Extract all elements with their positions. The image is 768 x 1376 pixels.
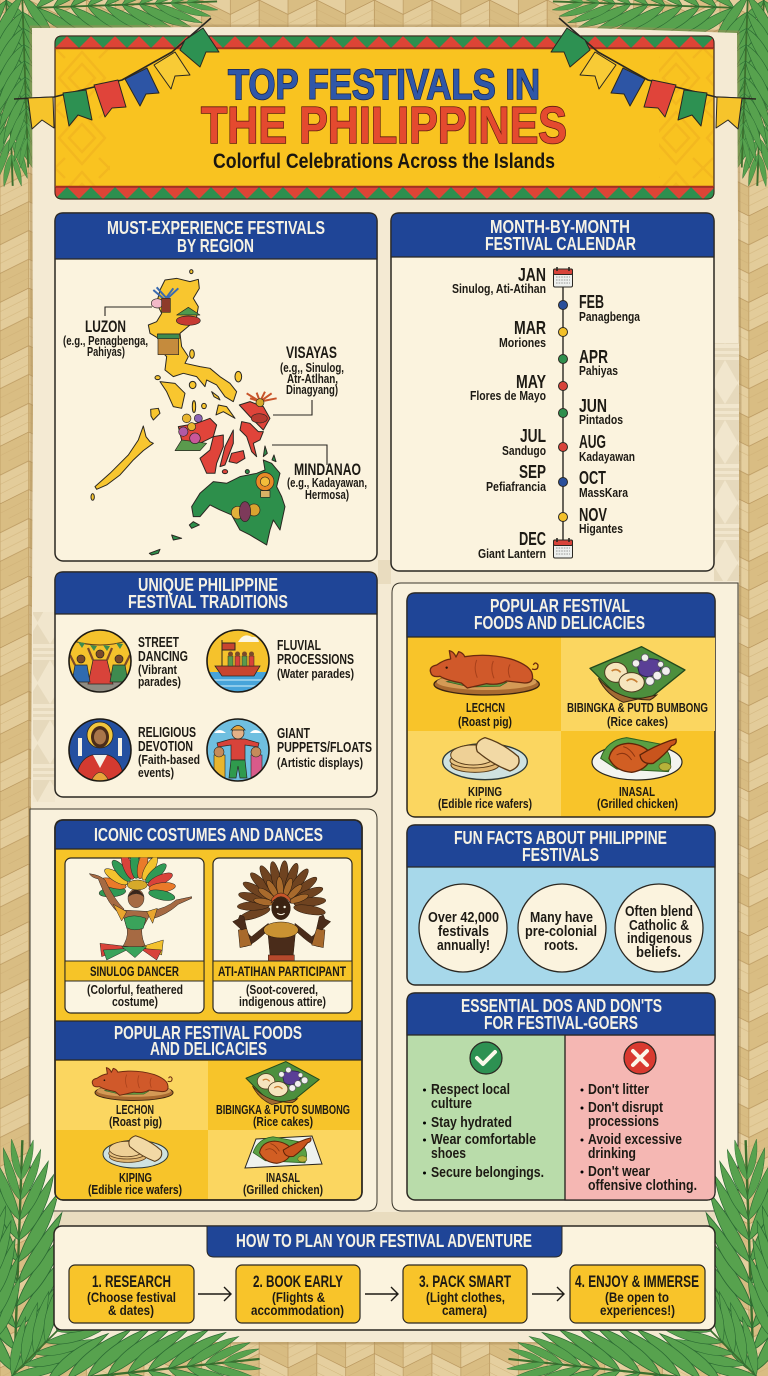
- step 2: [236, 1265, 360, 1323]
- list: don'ts: Don't wear: [588, 1164, 650, 1180]
- map icon: costume on Visayas: [247, 392, 277, 423]
- icon: giant puppets: [207, 719, 269, 781]
- list: dos: culture: [431, 1096, 472, 1112]
- label: Luzon: LUZON: [85, 318, 126, 336]
- list: dos: Respect local: [431, 1082, 510, 1098]
- description: indigenous attire): [239, 995, 326, 1009]
- heading: must-experience festivals: MUST-EXPERIENCE FESTIVALS: [107, 218, 325, 238]
- calendar entries: JUL: [520, 426, 546, 446]
- food: lechon: (Roast pig): [109, 1115, 162, 1129]
- fact: 42,000 festivals: festivals: [438, 924, 489, 940]
- heading: foods: POPULAR FESTIVAL: [490, 596, 630, 616]
- step 3: 3. PACK SMART: [419, 1273, 511, 1291]
- label: Visayas: Dinagyang): [286, 383, 338, 397]
- calendar entries: SEP: [519, 462, 546, 482]
- label: giant puppets: [277, 726, 372, 770]
- food: lechon: [92, 1068, 173, 1129]
- list: dos: Secure belongings.: [431, 1165, 544, 1181]
- panel: plan your adventure: [54, 1226, 715, 1330]
- calendar entries: AUG: [579, 432, 606, 452]
- list: don'ts: Don't disrupt: [588, 1100, 663, 1116]
- card: Ati-Atihan participant: [213, 858, 352, 1013]
- card: left lower backing: [30, 809, 377, 1211]
- food: lechon: LECHCN: [466, 701, 505, 715]
- list: don'ts: Don't litter: [588, 1082, 649, 1098]
- caption band: [65, 961, 204, 981]
- title line 1: TOP FESTIVALS IN: [228, 61, 540, 109]
- fact: blended beliefs: [615, 884, 703, 972]
- panel: fun facts: [407, 825, 715, 985]
- step 4: [570, 1265, 705, 1323]
- list: don'ts: [580, 1082, 697, 1194]
- map icon: flower float: [175, 414, 207, 451]
- step 3: (Light clothes,: [426, 1289, 505, 1305]
- label: Visayas: VISAYAS: [286, 344, 337, 362]
- map icon: headdress: [151, 287, 178, 312]
- label: religious devotion: events): [138, 766, 174, 780]
- calendar entries: MAY: [516, 372, 546, 392]
- description: [87, 983, 183, 1009]
- food: bibingka: (Rice cakes): [607, 715, 668, 729]
- palm leaves: top corners: [0, 0, 768, 188]
- calendar entries: FEB: [579, 292, 604, 312]
- label: Mindanao: MINDANAO: [294, 461, 361, 479]
- label: Luzon: Pahiyas): [87, 345, 125, 359]
- label: giant puppets: GIANT: [277, 726, 310, 742]
- heading: fun facts: [454, 828, 667, 865]
- list: dos: Stay hydrated: [431, 1115, 512, 1131]
- food: inasal: INASAL: [266, 1171, 300, 1185]
- illustration: Ati-Atihan participant: [233, 860, 331, 961]
- heading: month-by-month calendar: [485, 217, 636, 254]
- label: street dancing: STREET: [138, 635, 179, 651]
- fact: blended beliefs: Catholic &: [629, 918, 689, 934]
- title line 2: THE PHILIPPINES: [201, 97, 567, 155]
- list: don'ts: Avoid excessive: [588, 1132, 682, 1148]
- label: fluvial processions: FLUVIAL: [277, 638, 321, 654]
- description: (Colorful, feathered: [87, 983, 183, 997]
- arrow 2: [365, 1287, 398, 1301]
- card: Sinulog dancer: [65, 851, 204, 1013]
- list: don'ts: offensive clothing.: [588, 1178, 697, 1194]
- heading tab: [207, 1226, 562, 1257]
- step 3: [403, 1265, 527, 1323]
- label: Luzon: [63, 318, 148, 359]
- map icon: sun mask: [256, 473, 274, 497]
- icon: street dancing: [69, 630, 131, 692]
- list: dos: [423, 1082, 544, 1181]
- label: street dancing: parades): [138, 675, 181, 689]
- fact: 42,000 festivals: annually!: [437, 938, 490, 954]
- heading: traditions: [128, 575, 288, 612]
- map of the Philippines: [91, 270, 285, 555]
- food: inasal: INASAL: [619, 785, 655, 799]
- panel: costumes and foods: [55, 820, 362, 1200]
- title banner: [55, 36, 714, 199]
- step 2: 2. BOOK EARLY: [253, 1273, 343, 1291]
- fact: 42,000 festivals: Over 42,000: [428, 910, 499, 926]
- food: kiping: [438, 738, 532, 811]
- calendar entries: NOV: [579, 505, 607, 525]
- calendar entries: Kadayawan: [579, 450, 635, 464]
- food: bibingka: BIBINGKA & PUTO SUMBONG: [216, 1103, 350, 1117]
- description: costume): [112, 995, 158, 1009]
- food: bibingka: BIBINGKA & PUTD BUMBONG: [567, 701, 708, 715]
- callout lines: [105, 307, 327, 465]
- label: fluvial processions: [277, 638, 354, 681]
- heading: dos and don'ts: ESSENTIAL DOS AND DON'TS: [461, 996, 662, 1016]
- icon: calendar bottom: [554, 538, 572, 558]
- calendar entries: Pahiyas: [579, 364, 618, 378]
- calendar entries: JAN: [518, 265, 546, 285]
- caption band: SINULOG DANCER: [90, 964, 179, 979]
- fact: pre-colonial roots: Many have: [530, 910, 593, 926]
- label: religious devotion: RELIGIOUS: [138, 725, 196, 741]
- list: dos: shoes: [431, 1146, 466, 1162]
- step 1: & dates): [108, 1302, 154, 1318]
- calendar entries: Panagbenga: [579, 310, 641, 324]
- label: street dancing: (Vibrant: [138, 663, 178, 677]
- fact: 42,000 festivals: [419, 884, 507, 972]
- fact: pre-colonial roots: [518, 884, 606, 972]
- food: lechon: LECHON: [116, 1103, 154, 1117]
- heading: traditions: FESTIVAL TRADITIONS: [128, 592, 288, 612]
- label: Visayas: [280, 344, 344, 397]
- panel: festivals by region: [55, 213, 377, 561]
- calendar entries: MassKara: [579, 486, 629, 500]
- caption band: [213, 961, 352, 981]
- description: [239, 983, 326, 1009]
- panel: dos and don'ts: [407, 993, 715, 1200]
- calendar entries: Pefiafrancia: [486, 480, 547, 494]
- step 2: (Flights &: [272, 1289, 325, 1305]
- calendar entries: Sinulog, Ati-Atihan: [452, 282, 546, 296]
- caption band: ATI-ATIHAN PARTICIPANT: [218, 964, 347, 979]
- list: dos: Wear comfortable: [431, 1132, 536, 1148]
- icon: cross: [624, 1042, 656, 1074]
- label: Mindanao: (e.g., Kadayawan,: [287, 476, 367, 490]
- heading tab: HOW TO PLAN YOUR FESTIVAL ADVENTURE: [236, 1231, 532, 1251]
- step 2: accommodation): [251, 1302, 344, 1318]
- subtitle: Colorful Celebrations Across the Islands: [213, 150, 555, 173]
- icon: check: [470, 1042, 502, 1074]
- heading band: popular foods: [55, 1021, 362, 1060]
- fact: blended beliefs: Often blend: [625, 904, 693, 920]
- heading: foods: FOODS AND DELICACIES: [474, 613, 645, 633]
- calendar entries: [452, 265, 641, 561]
- palm leaves: bottom corners: [0, 1137, 768, 1376]
- food: bibingka: [216, 1062, 350, 1129]
- heading: foods: [474, 596, 645, 633]
- heading: dos and don'ts: [461, 996, 662, 1033]
- calendar entries: Flores de Mayo: [470, 389, 546, 403]
- label: Mindanao: [287, 461, 367, 502]
- food: bibingka: (Rice cakes): [253, 1115, 313, 1129]
- description: (Soot-covered,: [246, 983, 318, 997]
- step 4: 4. ENJOY & IMMERSE: [575, 1273, 699, 1291]
- fact: pre-colonial roots: pre-colonial: [525, 924, 597, 940]
- calendar entries: Pintados: [579, 413, 623, 427]
- label: Luzon: (e.g., Penagbenga,: [63, 334, 148, 348]
- food: bibingka: [567, 647, 708, 729]
- food: kiping: KIPING: [119, 1171, 152, 1185]
- label: religious devotion: DEVOTION: [138, 739, 193, 755]
- calendar entries: MAR: [514, 318, 546, 338]
- step 1: (Choose festival: [87, 1289, 176, 1305]
- arrow 1: [198, 1287, 231, 1301]
- icon: religious devotion: [69, 719, 131, 785]
- food: lechon: [430, 651, 539, 729]
- map icon: festival gate: [157, 334, 179, 355]
- step 4: (Be open to: [605, 1289, 669, 1305]
- fact: blended beliefs: beliefs.: [636, 945, 681, 961]
- fact: pre-colonial roots: roots.: [544, 938, 578, 954]
- panel: popular foods right: [407, 593, 715, 817]
- calendar entries: APR: [579, 347, 608, 367]
- label: Visayas: (e.g,, Sinulog,: [280, 361, 344, 375]
- list: don'ts: drinking: [588, 1146, 636, 1162]
- label: fluvial processions: PROCESSIONS: [277, 652, 354, 668]
- calendar entries: Sandugo: [502, 444, 546, 458]
- step 3: camera): [442, 1302, 487, 1318]
- food: kiping: [88, 1136, 182, 1197]
- label: Visayas: Atr-Atlhan,: [287, 372, 338, 386]
- food: inasal: [243, 1136, 323, 1197]
- food: inasal: (Grilled chicken): [597, 797, 678, 811]
- heading band: popular foods: AND DELICACIES: [150, 1039, 267, 1059]
- label: giant puppets: PUPPETS/FLOATS: [277, 740, 372, 756]
- heading: must-experience festivals: BY REGION: [177, 236, 254, 256]
- timeline with month markers: [558, 285, 568, 540]
- step 4: experiences!): [600, 1302, 675, 1318]
- food grid: [56, 1061, 361, 1199]
- heading: month-by-month calendar: MONTH-BY-MONTH: [490, 217, 630, 237]
- card: right backing: [392, 583, 738, 1211]
- heading: fun facts: FESTIVALS: [522, 845, 599, 865]
- calendar entries: Giant Lantern: [478, 547, 546, 561]
- step 1: [69, 1265, 194, 1323]
- food: kiping: (Edible rice wafers): [88, 1183, 182, 1197]
- icon: fluvial procession: [207, 630, 269, 692]
- label: giant puppets: (Artistic displays): [277, 756, 363, 770]
- food: inasal: (Grilled chicken): [243, 1183, 323, 1197]
- calendar entries: OCT: [579, 468, 606, 488]
- heading: fun facts: FUN FACTS ABOUT PHILIPPINE: [454, 828, 667, 848]
- heading: dos and don'ts: FOR FESTIVAL-GOERS: [484, 1013, 638, 1033]
- label: street dancing: [138, 635, 188, 689]
- food: kiping: KIPING: [468, 785, 502, 799]
- food: kiping: (Edible rice wafers): [438, 797, 532, 811]
- label: religious devotion: (Faith-based: [138, 753, 200, 767]
- calendar entries: JUN: [579, 396, 607, 416]
- label: Mindanao: Hermosa): [305, 488, 349, 502]
- food: inasal: [592, 738, 682, 811]
- label: street dancing: DANCING: [138, 649, 188, 665]
- calendar entries: Moriones: [499, 336, 546, 350]
- food: lechon: (Roast pig): [458, 715, 512, 729]
- map icon: fruit basket: [231, 502, 260, 522]
- heading band: popular foods: POPULAR FESTIVAL FOODS: [114, 1023, 302, 1043]
- panel: unique traditions: [55, 572, 377, 797]
- map icon: hut: [176, 307, 200, 325]
- panel: festival calendar: [391, 213, 714, 571]
- calendar entries: Higantes: [579, 522, 623, 536]
- label: fluvial processions: (Water parades): [277, 667, 354, 681]
- heading: iconic costumes: ICONIC COSTUMES AND DANCES: [94, 825, 323, 845]
- step 1: 1. RESEARCH: [92, 1273, 171, 1291]
- list: don'ts: processions: [588, 1114, 659, 1130]
- heading: traditions: UNIQUE PHILIPPINE: [138, 575, 278, 595]
- heading: must-experience festivals: [107, 218, 325, 256]
- illustration: Sinulog dancer: [89, 851, 192, 960]
- icon: calendar top: [554, 267, 572, 287]
- label: religious devotion: [138, 725, 200, 780]
- heading: month-by-month calendar: FESTIVAL CALENDAR: [485, 234, 636, 254]
- calendar entries: DEC: [519, 529, 546, 549]
- bunting flags: [14, 18, 756, 129]
- arrow 3: [532, 1287, 564, 1301]
- fact: blended beliefs: indigenous: [627, 931, 692, 947]
